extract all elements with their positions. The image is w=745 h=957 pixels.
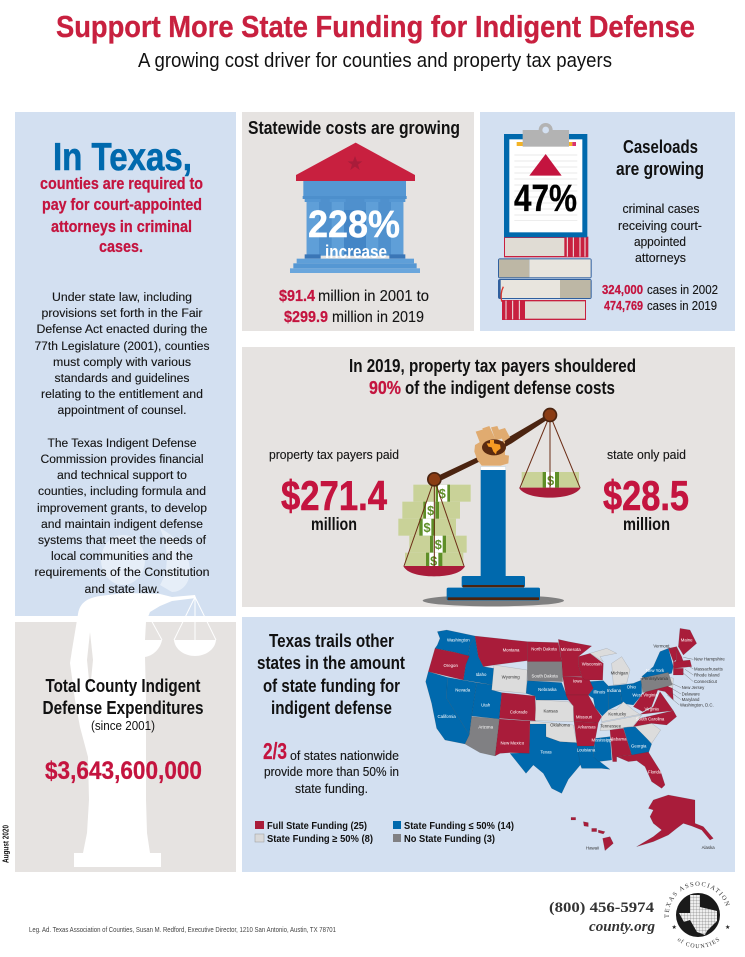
map labels: Minnesota xyxy=(561,647,581,652)
text block: state law: appointment of counsel. xyxy=(58,403,186,417)
text block: state law: provisions set forth in the Fair xyxy=(42,306,202,320)
text: criminal cases: attorneys xyxy=(635,251,686,265)
legend: Full State Funding (25) xyxy=(267,821,367,832)
heading: property tax share: In 2019, property tax payers shouldered xyxy=(349,356,636,376)
map labels: Mississippi xyxy=(592,738,612,743)
map labels: Maryland xyxy=(682,697,700,702)
text: cost range: million in 2019 xyxy=(332,309,424,326)
stat: state only paid xyxy=(603,448,689,534)
stat: state only paid: state only paid xyxy=(607,448,686,462)
logo: Texas Association of Counties: TEXAS ASSOCIATION xyxy=(664,882,730,918)
map labels: Indiana xyxy=(607,688,622,693)
map labels: Arkansas xyxy=(578,724,596,729)
map labels: New York xyxy=(646,668,665,673)
text: criminal cases xyxy=(618,202,702,265)
icon: books xyxy=(498,237,592,320)
map labels: North Dakota xyxy=(531,647,557,652)
map labels: West Virginia xyxy=(632,693,658,698)
heading: caseloads: are growing xyxy=(616,158,704,179)
text: case counts: 474,769 xyxy=(604,299,643,313)
text block: state law: and technical support to xyxy=(57,468,187,482)
text: two thirds of states: of states nationwide xyxy=(290,749,399,763)
map labels: Washington xyxy=(447,638,470,643)
logo: Texas Association of Counties: ★ xyxy=(725,924,730,931)
panel: property tax payers xyxy=(242,347,735,607)
map labels: Virginia xyxy=(644,706,659,711)
map labels: Rhode Island xyxy=(694,672,720,677)
map labels: Hawaii xyxy=(586,845,599,850)
legend: State Funding ≤ 50% (14) xyxy=(404,821,514,832)
text: cost range: $299.9 xyxy=(284,309,328,326)
label: increase: increase xyxy=(325,242,387,262)
text block: state law: and maintain indigent defense xyxy=(41,517,203,531)
heading: property tax share: of the indigent defense costs xyxy=(405,378,615,398)
text block: state law: Commission provides financial xyxy=(40,452,204,466)
text block: total county expenditures xyxy=(42,675,204,785)
subtitle: A growing cost driver for counties and property tax payers xyxy=(138,49,612,72)
stat: property tax payers paid: $271.4 xyxy=(281,472,388,519)
map labels: California xyxy=(438,714,456,719)
text block: state law: requirements of the Constitution xyxy=(34,565,210,579)
map labels: Kansas xyxy=(543,708,558,713)
map labels: Louisiana xyxy=(577,747,596,752)
text block: counties are required: attorneys in criminal xyxy=(51,218,192,236)
heading: caseloads: Caseloads xyxy=(623,136,698,157)
map labels: Georgia xyxy=(631,743,647,748)
text block: state law: standards and guidelines xyxy=(54,371,190,385)
text block: total county expenditures: $3,643,600,000 xyxy=(45,757,202,785)
legend: No State Funding (3) xyxy=(404,834,495,845)
map labels: Missouri xyxy=(576,715,592,720)
heading: In Texas: In Texas, xyxy=(53,136,192,179)
text: two thirds of states: 2/3 xyxy=(263,738,287,764)
icon: balance scale: $ xyxy=(435,538,442,552)
icon: balance scale: $ xyxy=(427,504,434,518)
text block: counties are required xyxy=(40,175,203,256)
panel: state funding map xyxy=(242,617,735,872)
panel: statewide costs xyxy=(242,112,474,331)
text block: counties are required: pay for court-appointed xyxy=(42,196,202,214)
text block: state law: Defense Act enacted during the xyxy=(36,322,208,336)
stat: property tax payers paid xyxy=(269,448,399,534)
text: case counts xyxy=(602,283,718,313)
icon: balance scale: $ xyxy=(547,474,554,488)
text: two thirds of states: state funding. xyxy=(295,782,368,796)
text block: state law: The Texas Indigent Defense xyxy=(48,436,197,450)
map labels: New Jersey xyxy=(682,685,705,690)
text: case counts: cases in 2002 xyxy=(647,283,718,297)
stat: property tax payers paid: property tax payers paid xyxy=(269,448,399,462)
text block: state law: Under state law, including xyxy=(52,290,192,304)
text: criminal cases: criminal cases xyxy=(622,202,700,216)
map labels: New Mexico xyxy=(501,741,525,746)
heading: property tax share: 90% xyxy=(369,378,401,398)
text: contact: county.org xyxy=(589,919,655,935)
text block: state law: relating to the entitlement and xyxy=(41,387,203,401)
text block: state law: local communities and the xyxy=(51,549,193,563)
text: two thirds of states xyxy=(263,738,399,796)
text block: counties are required: cases. xyxy=(99,238,143,256)
map labels: Colorado xyxy=(510,710,528,715)
text block: total county expenditures: Total County Indigent xyxy=(46,675,200,696)
map labels: Oklahoma xyxy=(550,723,570,728)
stat: 228%: 228% xyxy=(308,204,400,246)
panel: In Texas background xyxy=(15,112,236,616)
icon: balance scale: $ xyxy=(423,521,431,535)
stat: state only paid: $28.5 xyxy=(603,472,689,519)
map labels: South Carolina xyxy=(636,717,665,722)
map labels: Texas xyxy=(540,750,552,755)
map labels: Washington, D.C. xyxy=(680,702,714,707)
text block: counties are required: counties are required to xyxy=(40,175,203,193)
heading: Texas trails: Texas trails other xyxy=(269,630,394,651)
map labels: Wyoming xyxy=(502,675,520,680)
text block: state law: 77th Legislature (2001), counties xyxy=(34,339,210,353)
map labels: Florida xyxy=(648,769,662,774)
map labels: Arizona xyxy=(478,724,494,729)
text: criminal cases: appointed xyxy=(634,235,686,249)
text block: state law: must comply with various xyxy=(53,355,191,369)
text: case counts: cases in 2019 xyxy=(647,299,717,313)
stat: state only paid: million xyxy=(623,514,670,534)
heading: Texas trails: states in the amount xyxy=(257,652,405,673)
icon: lady justice silhouette xyxy=(70,528,216,867)
icon: clipboard xyxy=(504,123,587,237)
icon: balance scale xyxy=(398,408,581,606)
map labels: Alabama xyxy=(609,736,627,741)
text block: state law: improvement grants, to develop xyxy=(37,501,207,515)
text block: state law: and state law. xyxy=(84,582,160,596)
heading: caseloads xyxy=(616,136,704,179)
map labels: Iowa xyxy=(573,679,582,684)
map labels xyxy=(438,638,725,850)
map labels: Pennsylvania xyxy=(642,676,668,681)
heading: Texas trails xyxy=(257,630,405,718)
text block: total county expenditures: (since 2001) xyxy=(91,718,155,733)
heading: Texas trails: of state funding for xyxy=(263,675,400,696)
map: United States by funding type xyxy=(426,628,713,851)
logo: Texas Association of Counties xyxy=(664,882,730,948)
map labels: Connecticut xyxy=(694,679,718,684)
text: case counts: 324,000 xyxy=(602,283,643,297)
text: cost range: $91.4 xyxy=(279,288,315,305)
map labels: Michigan xyxy=(611,670,629,675)
text: criminal cases: receiving court- xyxy=(618,219,702,233)
logo: Texas Association of Counties: ★ xyxy=(672,924,677,931)
text: legal line: Leg. Ad. Texas Association of Counties, Susan M. Redford, Executive Director, 1210 San Antonio, Austin, TX 78701 xyxy=(29,925,336,934)
icon: balance scale: $ xyxy=(439,487,446,501)
legend xyxy=(255,821,514,845)
icon: balance scale: $ xyxy=(430,554,437,568)
heading: Texas trails: indigent defense xyxy=(271,697,392,718)
heading: property tax share xyxy=(349,356,636,398)
text: date: August 2020 xyxy=(2,825,10,863)
map labels: South Dakota xyxy=(532,674,558,679)
legend: State Funding ≥ 50% (8) xyxy=(267,834,373,845)
stat: property tax payers paid: million xyxy=(311,514,357,534)
map labels: Vermont xyxy=(653,643,670,648)
map labels: Massachusetts xyxy=(694,666,723,671)
map labels: Delaware xyxy=(682,691,701,696)
text block: state law: systems that meet the needs of xyxy=(38,533,207,547)
logo: Texas Association of Counties: of COUNTIES xyxy=(678,938,720,948)
map labels: Nebraska xyxy=(538,687,557,692)
map labels: Alaska xyxy=(702,845,715,850)
map labels: Maine xyxy=(681,638,693,643)
text: contact xyxy=(549,900,655,935)
text: contact: (800) 456-5974 xyxy=(549,900,655,916)
map labels: Kentucky xyxy=(608,712,627,717)
heading: statewide costs: Statewide costs are growing xyxy=(248,118,460,138)
map labels: New Hampshire xyxy=(694,657,725,662)
map labels: Oregon xyxy=(443,663,458,668)
map labels: Illinois xyxy=(593,690,605,695)
icon: capitol building xyxy=(290,143,420,273)
map labels: Ohio xyxy=(627,684,636,689)
text block: state law xyxy=(34,290,210,596)
stat: 47%: 47% xyxy=(514,178,577,220)
text: two thirds of states: provide more than 50% in xyxy=(264,765,399,779)
panel: total expenditures background xyxy=(15,622,236,872)
text block: state law: counties, including formula and xyxy=(38,484,206,498)
map labels: Montana xyxy=(503,648,520,653)
map labels: Idaho xyxy=(476,672,487,677)
map labels: Tennessee xyxy=(600,724,622,729)
map labels: Nevada xyxy=(455,687,471,692)
text: cost range: million in 2001 to xyxy=(318,288,429,305)
map labels: Wisconsin xyxy=(582,662,602,667)
map labels: Utah xyxy=(481,703,491,708)
text block: total county expenditures: Defense Expenditures xyxy=(42,697,204,718)
panel: caseloads xyxy=(480,112,735,331)
text: cost range xyxy=(279,288,429,326)
